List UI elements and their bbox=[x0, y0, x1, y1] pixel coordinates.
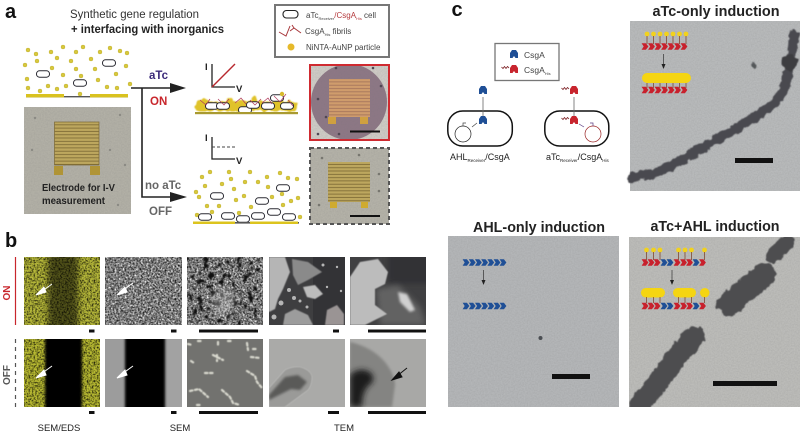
photo: OFF electrode, dashed border bbox=[310, 148, 389, 224]
inset: AHL-only assembly bbox=[463, 259, 506, 309]
photo: ON electrode, red border bbox=[310, 64, 389, 140]
cell: AHL receiver CsgA: Receiver bbox=[468, 158, 486, 163]
chart: I-V ON bbox=[205, 62, 243, 95]
label: ON row: ON bbox=[2, 286, 13, 300]
TEM: aTc-only bbox=[630, 21, 800, 191]
image: OFF SEM/EDS bbox=[24, 339, 100, 407]
image: ON SEM high magnification bbox=[187, 257, 263, 325]
TEM: aTc+AHL bbox=[629, 237, 800, 407]
cell: aTc receiver CsgAHis: Receiver bbox=[560, 158, 578, 163]
scale bar bbox=[713, 381, 777, 386]
label: OFF row: OFF bbox=[2, 365, 13, 385]
panel c: induction results bbox=[448, 0, 800, 407]
label: electrode for I-V measurement: measurement bbox=[42, 195, 105, 207]
panel b: microscopy grid bbox=[2, 230, 433, 433]
nanoparticle chain bbox=[632, 35, 798, 178]
panel letter b: b bbox=[5, 230, 17, 252]
image: OFF TEM high magnification bbox=[350, 339, 426, 407]
heading: interfacing with inorganics: + interfacing with inorganics bbox=[71, 24, 224, 36]
schematic: OFF layer with free particles bbox=[193, 170, 302, 224]
cell: aTc receiver CsgAHis: His bbox=[602, 158, 610, 163]
chart: I-V ON: V bbox=[236, 84, 243, 95]
nanoparticle bbox=[538, 336, 542, 340]
legend: CsgA and CsgAHis: CsgA bbox=[524, 50, 545, 60]
cell: AHL receiver CsgA: /CsgA bbox=[485, 152, 510, 162]
TEM: AHL-only bbox=[448, 236, 619, 407]
heading: aTc+AHL induction: aTc+AHL induction bbox=[650, 218, 780, 235]
scale bars bbox=[89, 330, 426, 414]
legend: cell, fibrils, particle: /CsgA bbox=[334, 11, 357, 20]
label: electrode for I-V measurement: Electrode for I-V bbox=[42, 182, 115, 194]
heading: synthetic gene regulation: Synthetic gene regulation bbox=[70, 9, 199, 21]
image: ON TEM bbox=[269, 257, 345, 325]
image: ON SEM bbox=[105, 257, 182, 325]
label: ON row bbox=[2, 257, 16, 325]
schematic: starting particles and cells bbox=[23, 45, 132, 97]
photo: electrode for I-V measurement bbox=[24, 107, 131, 214]
legend: cell, fibrils, particle: CsgA bbox=[305, 27, 325, 36]
cell: aTc receiver CsgAHis bbox=[545, 86, 610, 163]
legend: cell, fibrils, particle: aTc bbox=[306, 11, 318, 20]
arrow: black marker on TEM image bbox=[392, 368, 407, 380]
chart: I-V OFF: I bbox=[205, 133, 208, 144]
panel a: electrode assembly schematic bbox=[5, 1, 389, 224]
image: OFF SEM high magnification bbox=[187, 339, 263, 407]
cell: aTc receiver CsgAHis: aTc bbox=[546, 152, 560, 162]
heading: AHL-only induction: AHL-only induction bbox=[473, 219, 605, 236]
cell: AHL receiver CsgA bbox=[448, 86, 512, 163]
legend: cell, fibrils, particle: cell bbox=[362, 11, 376, 20]
label: OFF row bbox=[2, 339, 16, 407]
image: ON TEM high magnification bbox=[350, 257, 426, 325]
arrow: branching to ON and OFF bbox=[131, 83, 187, 202]
cell: aTc receiver CsgAHis: /CsgA bbox=[578, 152, 602, 162]
label: aTc: aTc bbox=[149, 70, 169, 82]
legend: cell, fibrils, particle: His bbox=[356, 16, 362, 21]
panel letter a: a bbox=[5, 1, 17, 23]
scale bar bbox=[735, 158, 773, 163]
label: ON: ON bbox=[150, 96, 167, 108]
legend: CsgA and CsgAHis bbox=[495, 44, 559, 80]
nanoparticle clusters bbox=[640, 243, 787, 405]
chart: I-V OFF bbox=[205, 133, 243, 167]
schematic: ON assembled layer bbox=[195, 92, 298, 114]
chart: I-V ON: I bbox=[205, 62, 208, 73]
image: ON SEM/EDS bbox=[24, 257, 100, 325]
chart: I-V OFF: V bbox=[236, 156, 243, 167]
legend: cell, fibrils, particle: NiNTA-AuNP particle bbox=[306, 43, 381, 52]
cell: AHL receiver CsgA: AHL bbox=[450, 152, 468, 162]
legend: cell, fibrils, particle: fibrils bbox=[330, 27, 351, 36]
heading: aTc-only induction: aTc-only induction bbox=[652, 3, 780, 20]
legend: CsgA and CsgAHis: CsgA bbox=[524, 65, 545, 75]
arrows: white markers on SEM images bbox=[36, 283, 133, 378]
image: OFF SEM bbox=[105, 339, 182, 407]
legend: cell, fibrils, particle: His bbox=[325, 32, 330, 37]
inset: aTc-only assembly bbox=[642, 32, 691, 93]
scale bar bbox=[552, 374, 590, 379]
label: OFF: OFF bbox=[149, 206, 172, 218]
legend: cell, fibrils, particle bbox=[275, 5, 389, 57]
legend: cell, fibrils, particle: Receiver bbox=[318, 16, 335, 21]
label: no aTc: no aTc bbox=[145, 180, 182, 192]
legend: CsgA and CsgAHis: His bbox=[545, 71, 551, 76]
inset: mixed assembly bbox=[641, 248, 710, 309]
image: OFF TEM bbox=[269, 339, 345, 407]
